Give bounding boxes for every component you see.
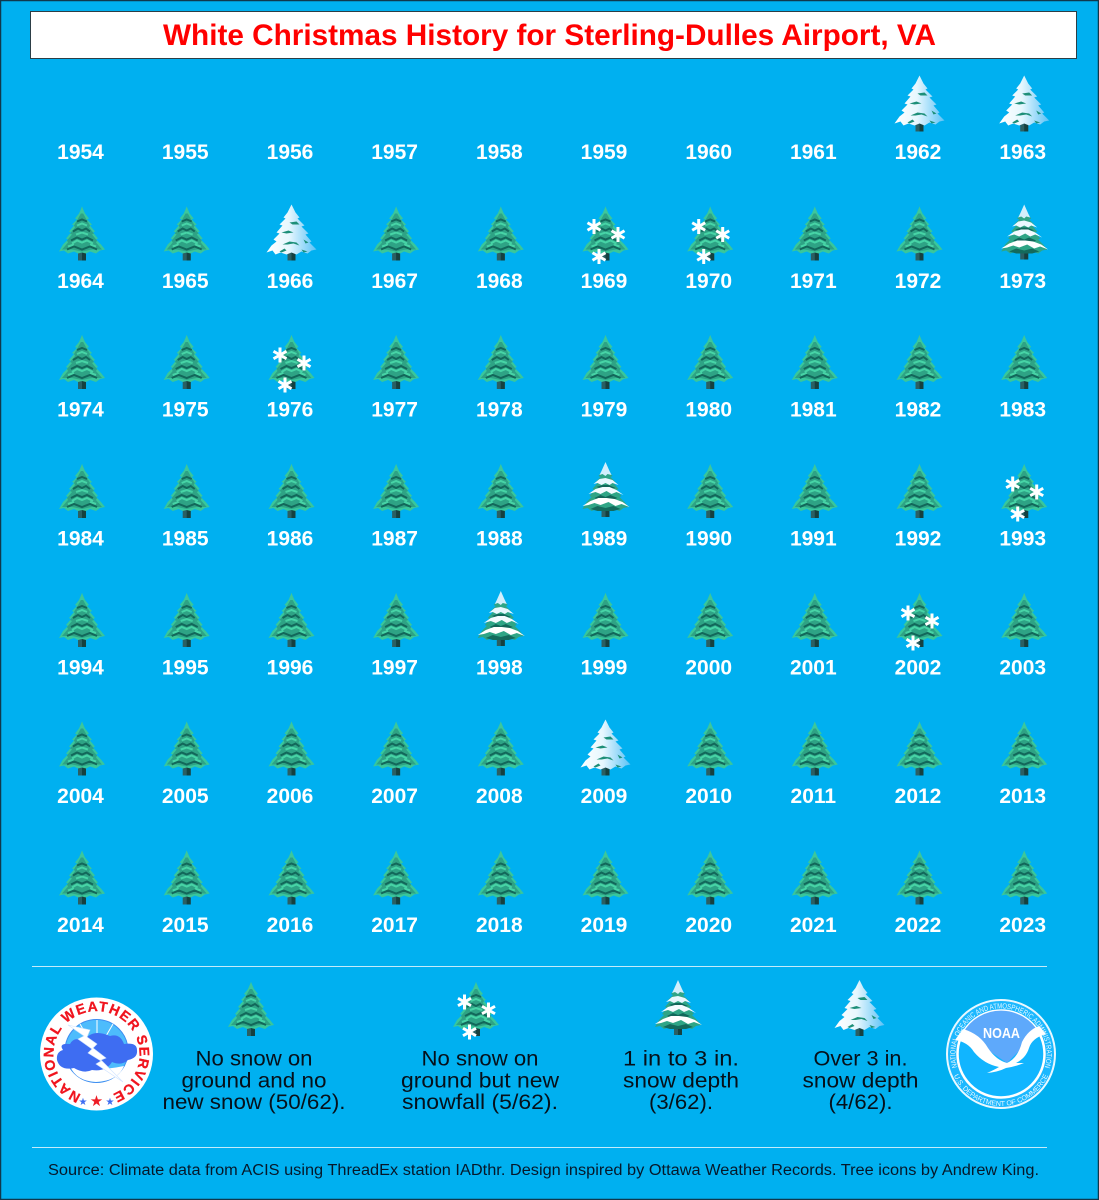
year 2011 — [791, 722, 838, 808]
year 2016: 2016 — [267, 914, 313, 937]
legend: no snow: No snow on — [196, 1048, 312, 1070]
year 1959: 1959 — [581, 141, 627, 164]
legend: over 3 inches: (4/62). — [828, 1091, 892, 1114]
year 1974: 1974 — [57, 398, 104, 422]
year 2010: 2010 — [685, 785, 732, 808]
year 1971: 1971 — [790, 270, 837, 293]
year 1963: 1963 — [999, 141, 1046, 164]
year 1967 — [371, 206, 419, 293]
logo: NOAA: NOAA — [983, 1025, 1020, 1042]
year 1954: 1954 — [57, 141, 104, 164]
year 2010 — [685, 722, 733, 808]
year 2007: 2007 — [371, 785, 418, 808]
legend: over 3 inches — [802, 980, 918, 1114]
logo: National Weather Service: ★ — [79, 1097, 88, 1108]
year 1970: 1970 — [685, 270, 732, 293]
year 1997 — [371, 593, 419, 680]
year 1972: 1972 — [895, 270, 941, 293]
year 1977: 1977 — [371, 398, 418, 422]
year 2020 — [685, 850, 733, 937]
arc text: NATIONAL WEATHER SERVICE — [44, 1001, 150, 1103]
year 1974 — [57, 335, 105, 422]
year 1998: 1998 — [476, 656, 523, 680]
year 1973: 1973 — [999, 270, 1046, 293]
year 2022 — [895, 850, 942, 937]
year 2011: 2011 — [791, 785, 836, 808]
year 1999: 1999 — [581, 656, 627, 680]
logo: NOAA — [946, 999, 1056, 1109]
year 1986: 1986 — [267, 528, 313, 550]
title — [30, 12, 1076, 58]
year 1956: 1956 — [267, 141, 313, 164]
year 2019: 2019 — [581, 914, 627, 937]
year 1983: 1983 — [999, 398, 1046, 422]
year 2018 — [476, 850, 524, 937]
year 1992: 1992 — [895, 528, 941, 550]
logo: National Weather Service — [40, 998, 153, 1110]
year 2017 — [371, 850, 419, 937]
year 1984 — [57, 464, 105, 550]
year 1982 — [895, 335, 942, 422]
year 1958: 1958 — [476, 141, 523, 164]
stars: ★ — [90, 1093, 103, 1110]
year 2019 — [581, 850, 628, 937]
year 1978 — [476, 335, 524, 422]
year 1996 — [267, 593, 314, 680]
year 1987 — [371, 464, 419, 550]
year 2022: 2022 — [895, 914, 941, 937]
year 1993: 1993 — [999, 528, 1046, 550]
year 1969 — [581, 206, 628, 293]
year 2007 — [371, 722, 419, 808]
year 1989 — [581, 462, 630, 550]
year 2004: 2004 — [57, 785, 104, 808]
year 1966 — [266, 204, 316, 293]
year 1985 — [162, 464, 210, 550]
year 1990 — [685, 464, 733, 550]
year 2021: 2021 — [790, 914, 837, 937]
year 1962: 1962 — [895, 141, 941, 164]
year 2012: 2012 — [895, 785, 941, 808]
year 1990: 1990 — [685, 528, 732, 550]
year 1965 — [162, 206, 210, 293]
year 1987: 1987 — [371, 528, 418, 550]
year 1968 — [476, 206, 524, 293]
year 1986 — [267, 464, 314, 550]
legend: 1 to 3 inches: (3/62). — [649, 1091, 713, 1114]
year 1984: 1984 — [57, 528, 104, 550]
year 1957: 1957 — [371, 141, 418, 164]
year 1988: 1988 — [476, 528, 523, 550]
year 1998 — [476, 591, 525, 680]
year 1965: 1965 — [162, 270, 209, 293]
year 1968: 1968 — [476, 270, 523, 293]
year 1975: 1975 — [162, 398, 209, 422]
year 1976: 1976 — [267, 398, 313, 422]
year 2015 — [162, 850, 210, 937]
year 1978: 1978 — [476, 398, 523, 422]
cloud — [57, 1033, 137, 1072]
legend: new snowfall — [401, 982, 560, 1114]
year 1991: 1991 — [790, 528, 837, 550]
year 2013: 2013 — [999, 785, 1046, 808]
legend: 1 to 3 inches: 1 in to 3 in. — [623, 1048, 739, 1070]
year 1994: 1994 — [57, 656, 104, 680]
year 1992 — [895, 464, 942, 550]
year 2005: 2005 — [162, 785, 209, 808]
year 1963 — [999, 76, 1049, 164]
year 1988 — [476, 464, 524, 550]
legend: no snow — [162, 982, 346, 1114]
year 1979: 1979 — [581, 398, 627, 422]
year 1975 — [162, 335, 210, 422]
year 2009: 2009 — [581, 785, 627, 808]
year 1979 — [581, 335, 628, 422]
year 2005 — [162, 722, 210, 808]
year 1982: 1982 — [895, 398, 941, 422]
year 1977 — [371, 335, 419, 422]
year 1994 — [57, 593, 105, 680]
legend: 1 to 3 inches — [623, 980, 739, 1114]
lightning bolt — [68, 1025, 123, 1082]
logo: National Weather Service: ★ — [106, 1097, 115, 1108]
title: White Christmas History for Sterling-Dulles Airport, VA — [163, 19, 936, 52]
year 2021 — [790, 850, 838, 937]
seagull — [955, 1026, 1046, 1073]
year 2009 — [580, 720, 630, 808]
year 1972 — [895, 206, 942, 293]
legend: 1 to 3 inches: snow depth — [623, 1070, 739, 1092]
year 1969: 1969 — [581, 270, 627, 293]
year 1970 — [685, 206, 733, 293]
year 2002: 2002 — [895, 656, 941, 680]
year 2004 — [57, 722, 105, 808]
year 2000 — [685, 593, 733, 680]
year 1980 — [685, 335, 733, 422]
year 1980: 1980 — [685, 398, 732, 422]
year 2016 — [267, 850, 314, 937]
year 2006: 2006 — [267, 785, 313, 808]
year 2020: 2020 — [685, 914, 732, 937]
year 2015: 2015 — [162, 914, 209, 937]
year 1961: 1961 — [790, 141, 837, 164]
year 2003 — [999, 593, 1047, 680]
year 1993 — [999, 464, 1047, 550]
year 1964 — [57, 206, 105, 293]
legend: new snowfall: snowfall (5/62). — [402, 1091, 558, 1114]
year 2001: 2001 — [790, 656, 837, 680]
year 2012 — [895, 722, 942, 808]
year 1983 — [999, 335, 1047, 422]
year 2008 — [476, 722, 524, 808]
year 1967: 1967 — [371, 270, 418, 293]
year 1985: 1985 — [162, 528, 209, 550]
year 1976 — [267, 335, 314, 422]
year 1962 — [894, 76, 944, 164]
year 1973 — [999, 204, 1048, 293]
legend: over 3 inches: Over 3 in. — [814, 1048, 908, 1070]
year 1995 — [162, 593, 210, 680]
year 2001 — [790, 593, 838, 680]
year 2006 — [267, 722, 314, 808]
year 1966: 1966 — [267, 270, 313, 293]
year 1997: 1997 — [371, 656, 418, 680]
year 1989: 1989 — [581, 528, 627, 550]
year 1955: 1955 — [162, 141, 209, 164]
year 1960: 1960 — [685, 141, 732, 164]
year 2013 — [999, 722, 1047, 808]
year 2023 — [999, 850, 1047, 937]
source note: Source: Climate data from ACIS using ThreadEx station IADthr. Design inspired by Ottawa Weather Records. Tree icons by Andrew King. — [48, 1162, 1039, 1179]
logo: NOAA: NATIONAL OCEANIC AND ATMOSPHERIC ADMINISTRATION — [950, 1003, 1052, 1068]
year 1964: 1964 — [57, 270, 104, 293]
logo: NOAA: U.S. DEPARTMENT OF COMMERCE — [954, 1074, 1048, 1106]
year 2014: 2014 — [57, 914, 104, 937]
legend: over 3 inches: snow depth — [802, 1070, 918, 1092]
year 2023: 2023 — [999, 914, 1046, 937]
year 1996: 1996 — [267, 656, 313, 680]
legend: new snowfall: ground but new — [401, 1070, 560, 1092]
year 2017: 2017 — [371, 914, 418, 937]
year 2002 — [895, 593, 942, 680]
year 1971 — [790, 206, 838, 293]
year 1999 — [581, 593, 628, 680]
year 1981: 1981 — [790, 398, 837, 422]
year 1991 — [790, 464, 838, 550]
year 2000: 2000 — [685, 656, 732, 680]
year 2014 — [57, 850, 105, 937]
year 1995: 1995 — [162, 656, 209, 680]
year 1981 — [790, 335, 838, 422]
legend: no snow: new snow (50/62). — [162, 1091, 346, 1114]
year 2003: 2003 — [999, 656, 1046, 680]
legend: new snowfall: No snow on — [422, 1048, 538, 1070]
legend: no snow: ground and no — [182, 1070, 326, 1092]
year 2008: 2008 — [476, 785, 523, 808]
year 2018: 2018 — [476, 914, 523, 937]
